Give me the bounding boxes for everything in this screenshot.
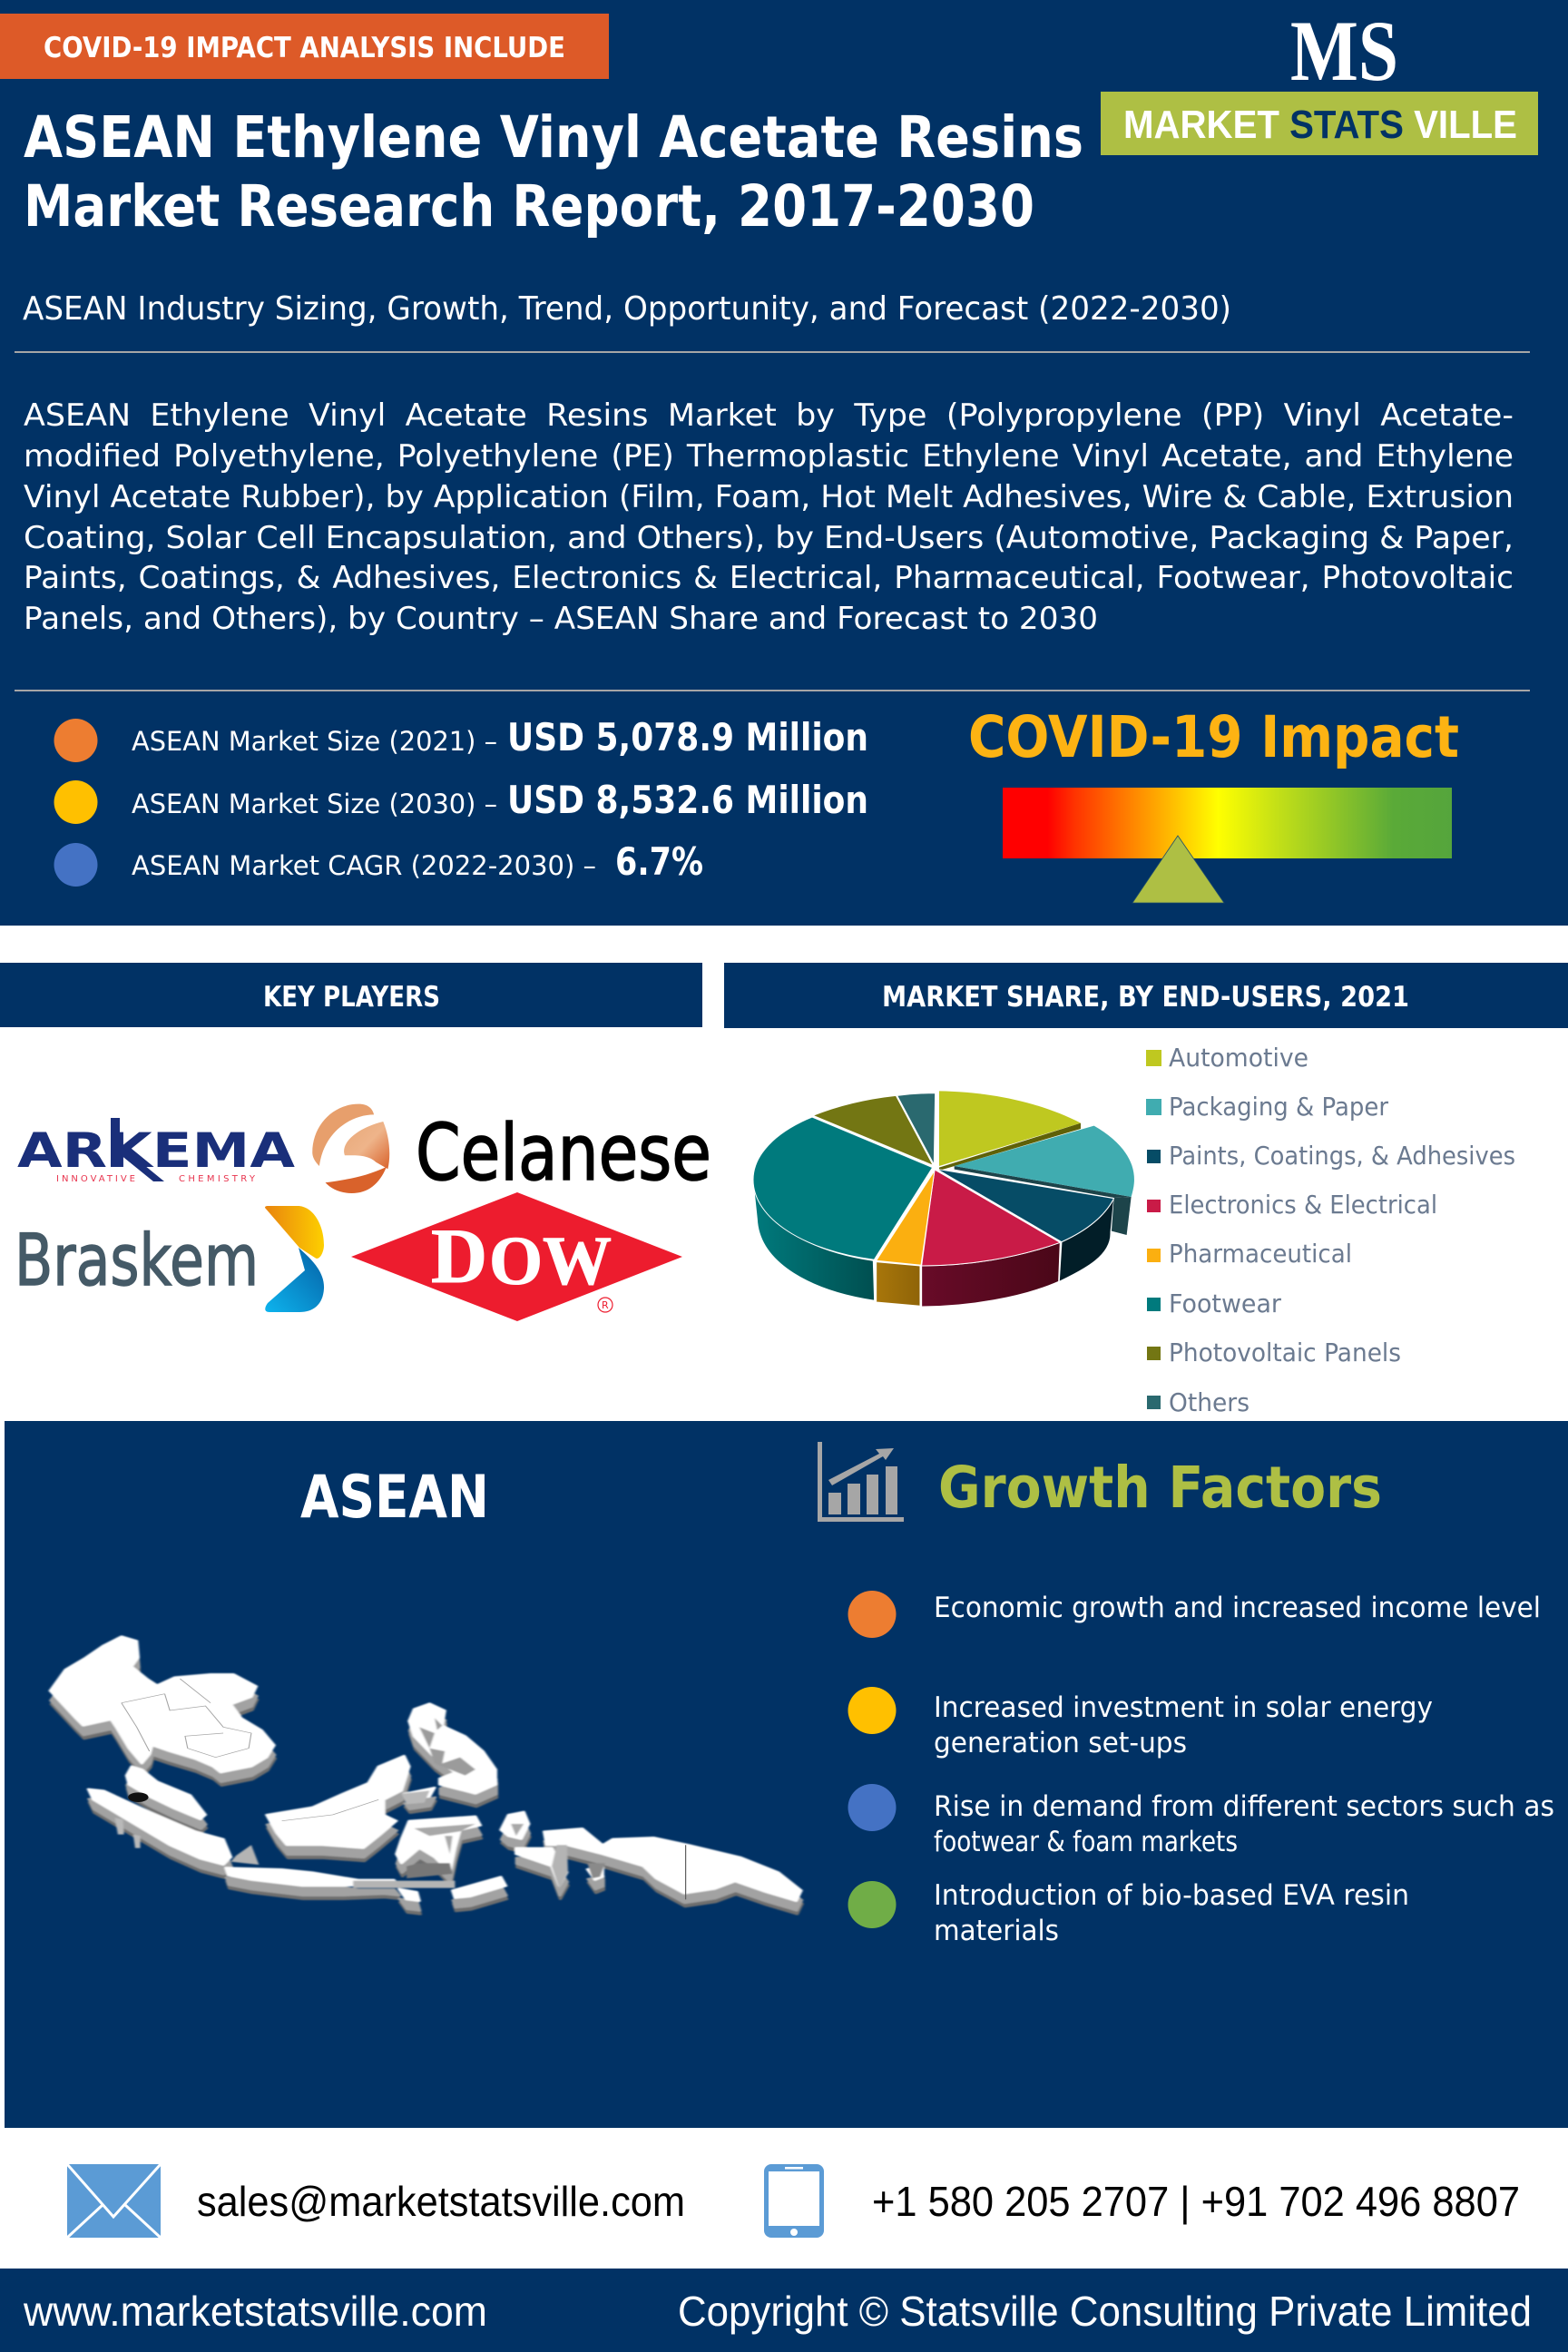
lower panel xyxy=(5,1421,1568,2128)
logo: arkema: INNOVATIVE xyxy=(56,1174,135,1184)
factor 4: materials xyxy=(934,1915,1059,1947)
logo: celanese swirl xyxy=(312,1104,389,1193)
logo: dow: R xyxy=(602,1299,609,1311)
phone numbers: +1 580 205 2707 | +91 702 496 8807 xyxy=(872,2178,1520,2225)
logo: celanese: Celanese xyxy=(416,1108,711,1199)
heading: asean: ASEAN xyxy=(300,1464,489,1532)
website: www.marketstatsville.com xyxy=(23,2288,487,2335)
slice: paints, coatings and adhesives xyxy=(936,1169,1114,1242)
subtitle: ASEAN Industry Sizing, Growth, Trend, Opportunity, and Forecast (2022-2030) xyxy=(23,290,1231,328)
factor 1 xyxy=(848,1591,1541,1638)
logo: dow: W xyxy=(543,1223,612,1299)
factor 2 xyxy=(848,1687,1433,1759)
pie legend: Packaging & Paper xyxy=(1169,1092,1388,1122)
pie legend: Others xyxy=(1169,1387,1250,1417)
market size stat 2021: ASEAN Market Size (2021) – xyxy=(132,726,497,757)
market size stat 2030: ASEAN Market Size (2030) – xyxy=(132,789,497,819)
pie legend xyxy=(1146,1043,1515,1417)
description paragraph: modified Polyethylene, Polyethylene (PE) Thermoplastic Ethylene Vinyl Acetate, and Ethylene xyxy=(24,438,1514,475)
slice: pharmaceutical xyxy=(877,1171,935,1265)
logo: arkema: CHEMISTRY xyxy=(179,1174,256,1184)
covid-19 impact gauge: COVID-19 Impact xyxy=(968,704,1459,770)
factor 3 xyxy=(848,1784,1554,1858)
map: asean region xyxy=(50,1636,802,1915)
3d pie chart xyxy=(753,1091,1134,1307)
market CAGR stat: 6.7% xyxy=(615,839,703,884)
covid-19 impact gauge xyxy=(968,704,1459,903)
market size stat 2021 xyxy=(54,715,868,762)
slice: automotive xyxy=(939,1091,1081,1166)
pie legend: Pharmaceutical xyxy=(1169,1239,1352,1269)
logo: braskem: Braskem xyxy=(15,1220,259,1302)
heading: growth factors: Growth Factors xyxy=(938,1455,1382,1521)
slice: packaging and paper xyxy=(955,1126,1134,1197)
key players heading: KEY PLAYERS xyxy=(263,981,440,1014)
logo: arkema: ARKEMA xyxy=(17,1123,295,1179)
factor 2: Increased investment in solar energy xyxy=(934,1691,1433,1724)
logo: market stats ville: MS xyxy=(1290,3,1398,99)
icon: envelope xyxy=(67,2164,161,2238)
description paragraph: ASEAN Ethylene Vinyl Acetate Resins Market by Type (Polypropylene (PP) Vinyl Acetate- xyxy=(24,397,1514,434)
logo: dow: D xyxy=(431,1212,487,1299)
factor 3: footwear & foam markets xyxy=(934,1826,1238,1858)
factor 1: Economic growth and increased income level xyxy=(934,1592,1541,1624)
slice: electronics and electrical xyxy=(922,1170,1060,1266)
factor 3: Rise in demand from different sectors such as xyxy=(934,1790,1554,1823)
factor 4 xyxy=(848,1879,1409,1947)
title: Market Research Report, 2017-2030 xyxy=(24,173,1034,240)
key players heading xyxy=(0,963,702,1027)
logo: market stats ville xyxy=(1101,3,1538,155)
description paragraph: Coating, Solar Cell Encapsulation, and Others), by End-Users (Automotive, Packaging & Paper, xyxy=(24,520,1514,556)
factor 2: generation set-ups xyxy=(934,1727,1187,1759)
copyright: Copyright © Statsville Consulting Private Limited xyxy=(678,2288,1532,2335)
email: sales@marketstatsville.com xyxy=(197,2178,685,2225)
logo: market stats ville: MARKET STATS VILLE xyxy=(1123,103,1517,147)
side faces xyxy=(754,1187,1114,1307)
market size stat 2021: USD 5,078.9 Million xyxy=(507,715,868,760)
pie legend: Automotive xyxy=(1169,1043,1308,1073)
description paragraph: Vinyl Acetate Rubber), by Application (Film, Foam, Hot Melt Adhesives, Wire & Cable, Extrusion xyxy=(24,479,1514,515)
factor 4: Introduction of bio-based EVA resin xyxy=(934,1879,1409,1912)
covid badge xyxy=(0,14,609,79)
footer bar xyxy=(0,2269,1568,2352)
market share heading: MARKET SHARE, BY END-USERS, 2021 xyxy=(882,981,1409,1014)
growth factors icon xyxy=(818,1442,904,1522)
description paragraph: Paints, Coatings, & Adhesives, Electronics & Electrical, Pharmaceutical, Footwear, Photovoltaic xyxy=(24,560,1514,596)
description paragraph: Panels, and Others), by Country – ASEAN Share and Forecast to 2030 xyxy=(24,601,1098,637)
pie legend: Photovoltaic Panels xyxy=(1169,1338,1401,1367)
slice: others xyxy=(897,1093,936,1164)
market share heading xyxy=(724,963,1568,1028)
title xyxy=(24,104,1083,240)
logo: dow: O xyxy=(489,1223,543,1299)
pie legend: Electronics & Electrical xyxy=(1169,1190,1437,1220)
slice: footwear xyxy=(753,1117,933,1259)
description paragraph xyxy=(24,397,1514,637)
covid badge: COVID-19 IMPACT ANALYSIS INCLUDE xyxy=(44,32,565,64)
title: ASEAN Ethylene Vinyl Acetate Resins xyxy=(24,104,1083,171)
icon: phone xyxy=(764,2164,824,2238)
market size stat 2030: USD 8,532.6 Million xyxy=(507,778,868,822)
logo: dow xyxy=(351,1192,682,1321)
slice: photovoltaic panels xyxy=(813,1095,933,1165)
market size stat 2030 xyxy=(54,778,868,824)
logo: arkema xyxy=(17,1118,295,1184)
market CAGR stat xyxy=(54,839,703,887)
pie legend: Paints, Coatings, & Adhesives xyxy=(1169,1141,1515,1171)
header panel xyxy=(0,0,1568,926)
pie legend: Footwear xyxy=(1169,1289,1281,1318)
market CAGR stat: ASEAN Market CAGR (2022-2030) – xyxy=(132,850,596,881)
